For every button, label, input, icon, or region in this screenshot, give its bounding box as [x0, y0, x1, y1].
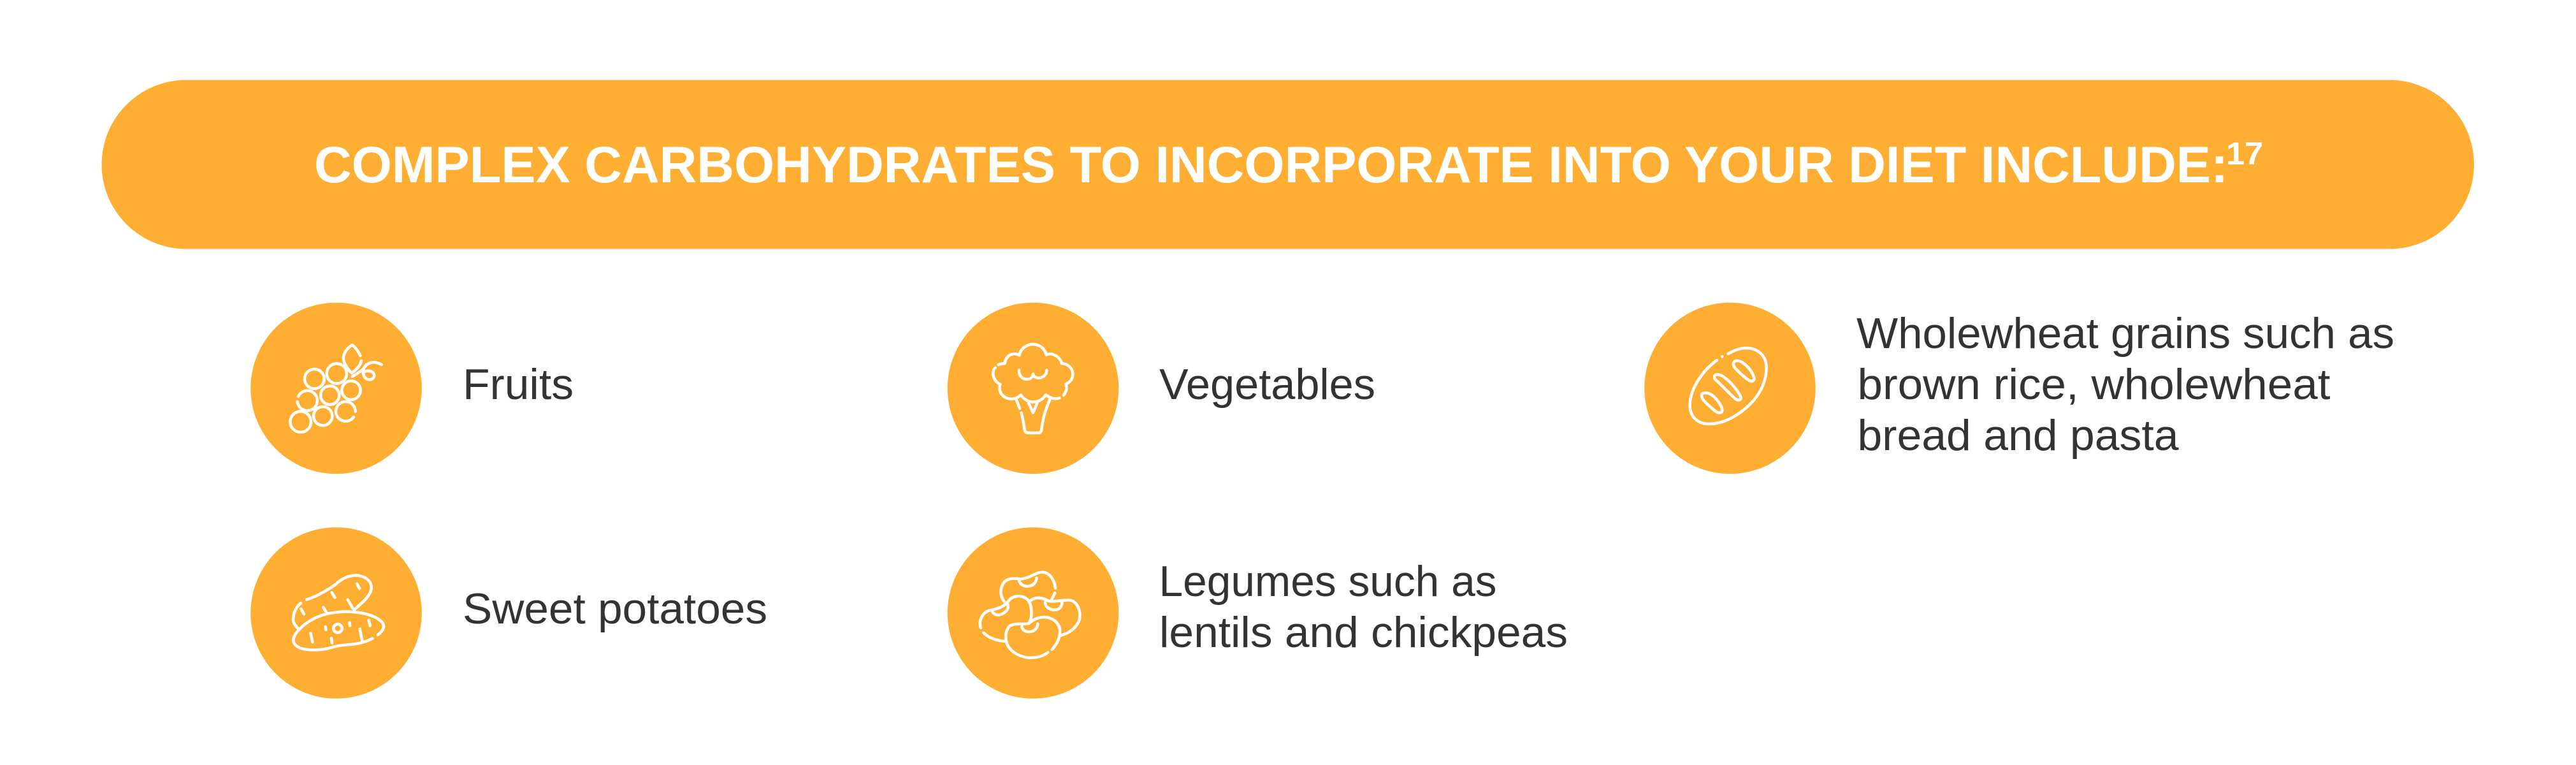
- icon: grapes: [250, 303, 422, 474]
- label: fruits: Fruits: [463, 360, 574, 409]
- title: COMPLEX CARBOHYDRATES TO INCORPORATE INTO YOUR DIET INCLUDE:: [314, 136, 2228, 194]
- item: vegetables: [948, 303, 1375, 474]
- label: wholewheat grains: [1856, 309, 2394, 460]
- item: legumes: [948, 527, 1568, 699]
- label: wholewheat grains: bread and pasta: [1857, 411, 2179, 460]
- label: legumes: lentils and chickpeas: [1159, 608, 1568, 657]
- item: fruits: [250, 303, 574, 474]
- icon: broccoli: [948, 303, 1118, 474]
- label: wholewheat grains: brown rice, wholewheat: [1857, 360, 2331, 409]
- label: legumes: [1159, 557, 1568, 657]
- icon: bread loaf: [1644, 303, 1816, 474]
- item: sweet potatoes: [250, 527, 767, 699]
- header banner: [102, 80, 2474, 249]
- icon: beans: [948, 527, 1118, 699]
- title: 17: [2226, 136, 2263, 171]
- item: wholewheat grains: [1644, 303, 2394, 474]
- icon: sweet potatoes: [250, 527, 422, 699]
- label: sweet potatoes: Sweet potatoes: [463, 585, 767, 633]
- label: vegetables: Vegetables: [1159, 360, 1375, 409]
- label: legumes: Legumes such as: [1159, 557, 1496, 606]
- label: wholewheat grains: Wholewheat grains such as: [1856, 309, 2394, 358]
